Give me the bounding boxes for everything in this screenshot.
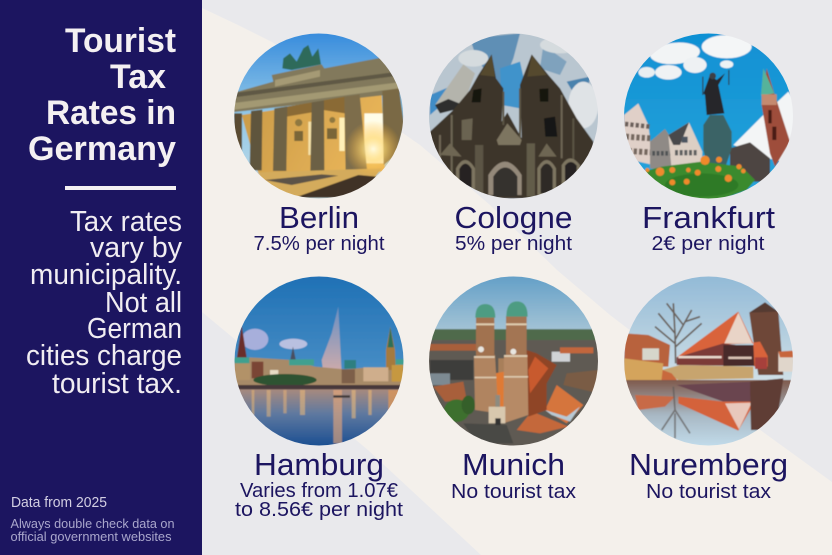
tax rate: Varies from 1.07€ (240, 480, 398, 502)
title divider (65, 186, 176, 190)
title: Germany (28, 130, 176, 168)
description text: municipality. (30, 259, 182, 291)
diagonal cream band (202, 8, 832, 555)
city name: Berlin (279, 200, 359, 235)
city name: Munich (462, 447, 565, 482)
city name: Frankfurt (642, 200, 775, 235)
panel: left sidebar (0, 0, 202, 555)
tax rate: No tourist tax (646, 481, 771, 503)
tax rate: 7.5% per night (254, 233, 385, 255)
description text: Tax rates (70, 206, 182, 238)
panel: Nuremberg (624, 276, 793, 498)
disclaimer note: official government websites (10, 529, 172, 544)
description text (26, 206, 182, 400)
panel: Munich (429, 276, 598, 498)
data year note: Data from 2025 (11, 495, 107, 511)
tax rate: to 8.56€ per night (235, 499, 403, 521)
description text: vary by (90, 232, 182, 264)
description text: Not all (105, 287, 182, 319)
title: Tax (110, 58, 166, 96)
panel: Hamburg (234, 276, 404, 520)
city name: Hamburg (254, 447, 384, 482)
disclaimer note (10, 516, 174, 544)
city name: Cologne (454, 200, 572, 235)
description text: German (87, 313, 182, 345)
panel: Frankfurt (624, 34, 793, 254)
description text: tourist tax. (52, 368, 182, 400)
tax rate: 2€ per night (652, 233, 765, 255)
city name: Nuremberg (629, 447, 788, 482)
photo: Weinstadel riverside (624, 276, 793, 446)
title: Tourist (65, 22, 176, 60)
title (28, 22, 176, 168)
panel: Berlin (234, 34, 404, 254)
disclaimer note: Always double check data on (10, 516, 174, 531)
title: Rates in (46, 94, 176, 132)
description text: cities charge (26, 340, 182, 372)
photo: Alster lake and fountain (234, 276, 404, 446)
photo: Römerberg square (624, 34, 793, 198)
panel: Cologne (429, 34, 598, 254)
photo: Frauenkirche (429, 276, 598, 446)
photo: Cologne Cathedral (429, 34, 598, 198)
tax rate: No tourist tax (451, 481, 576, 503)
tax rate: 5% per night (455, 233, 572, 255)
photo: Brandenburg Gate (234, 34, 404, 198)
tax rate (235, 480, 403, 521)
